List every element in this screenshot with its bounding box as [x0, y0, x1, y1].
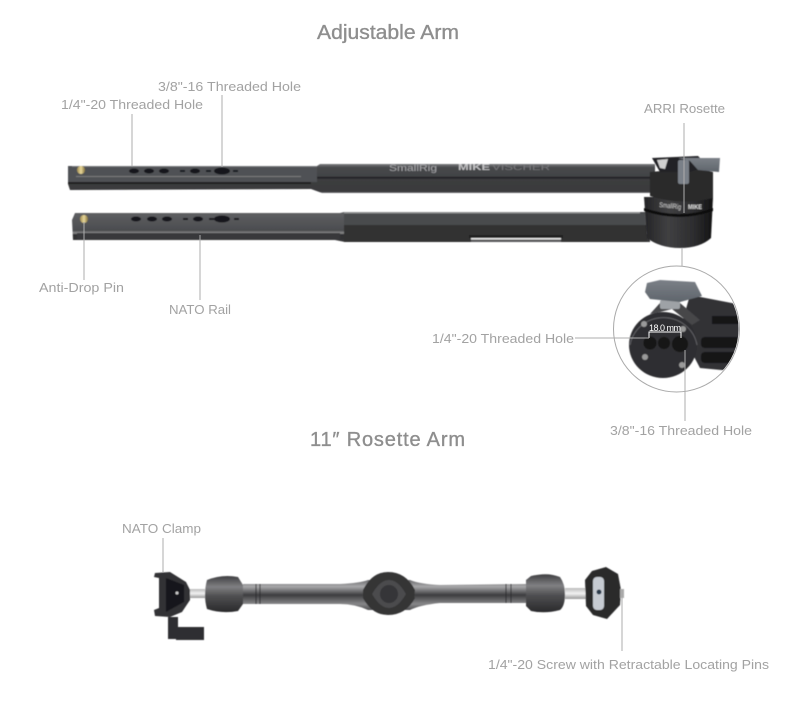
label: 1/4"-20 threaded hole (top): 1/4"-20 Threaded Hole	[61, 97, 203, 112]
image: ARRI rosette joint: MIKE	[688, 205, 702, 211]
image: rosette close-up render	[629, 280, 743, 378]
title: 11 inch Rosette Arm: 11″ Rosette Arm	[310, 429, 465, 451]
label: 3/8"-16 threaded hole (top): 3/8"-16 Threaded Hole	[158, 79, 301, 94]
rod and central hub	[243, 580, 526, 610]
label: 3/8"-16 threaded hole (inset): 3/8"-16 Threaded Hole	[610, 423, 752, 438]
NATO clamp	[154, 572, 205, 640]
title: Adjustable Arm: Adjustable Arm	[317, 22, 459, 44]
label: ARRI Rosette: ARRI Rosette	[644, 101, 725, 116]
dimension: 18.0 mm: 18.0 mm	[649, 323, 681, 333]
locating pin head	[565, 567, 624, 619]
leader lines	[84, 95, 685, 651]
label: NATO Clamp: NATO Clamp	[122, 521, 201, 536]
image: ARRI rosette joint	[644, 156, 720, 248]
image: adjustable arm upper bar	[68, 163, 655, 193]
left ball	[205, 576, 243, 612]
inset: rosette close-up	[614, 266, 743, 392]
label: NATO Rail: NATO Rail	[169, 302, 231, 317]
label: 1/4"-20 threaded hole (inset): 1/4"-20 Threaded Hole	[432, 331, 574, 346]
image: ARRI rosette joint: SmallRig	[659, 202, 681, 211]
label: Anti-Drop Pin: Anti-Drop Pin	[39, 280, 124, 295]
image: adjustable arm upper bar: MIKE	[458, 163, 491, 172]
image: rosette arm	[154, 567, 624, 640]
right ball	[526, 574, 565, 612]
image: adjustable arm upper bar: SmallRig	[389, 163, 437, 173]
image: adjustable arm upper bar: VISCHER	[492, 163, 550, 172]
image: adjustable arm lower bar	[72, 212, 650, 242]
label: 1/4"-20 screw with retractable locating pins: 1/4"-20 Screw with Retractable Locating Pins	[488, 657, 770, 672]
